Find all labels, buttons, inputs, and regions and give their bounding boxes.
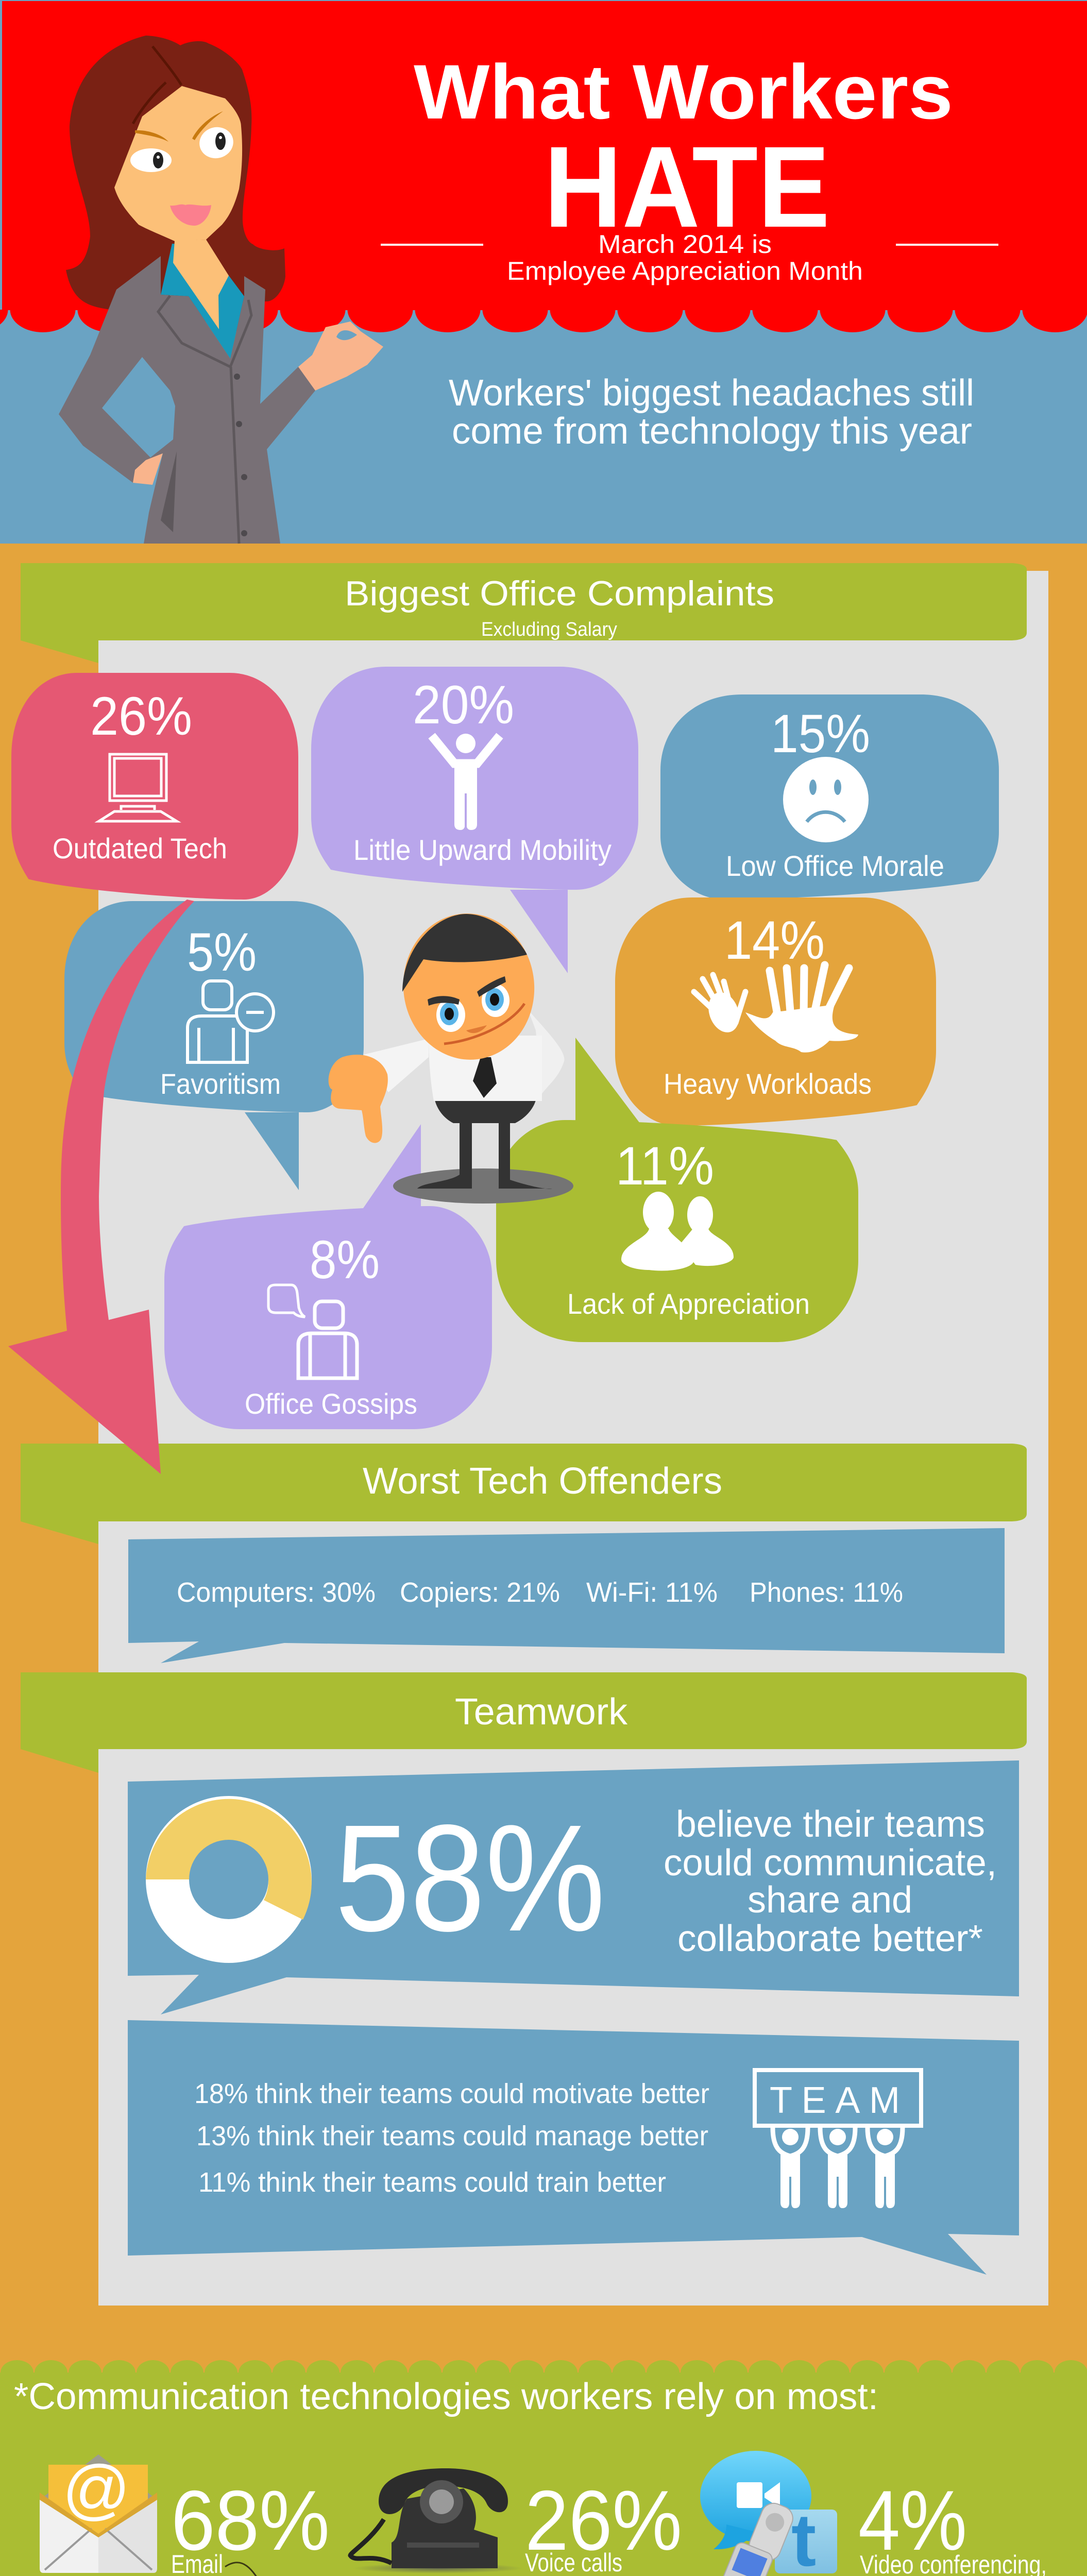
bubble: outdated tech xyxy=(11,673,298,900)
heading: biggest office complaints: Biggest Office Complaints xyxy=(345,574,774,613)
banner: 58 percent callout: could communicate, xyxy=(664,1842,997,1884)
panel: communication technologies: 68% xyxy=(171,2473,330,2568)
bubble: lack of appreciation xyxy=(496,1038,858,1342)
title: What Workers xyxy=(414,48,953,135)
icon: hands xyxy=(694,965,858,1053)
bubble: little upward mobility: Little Upward Mobility xyxy=(353,834,612,866)
icon: person with minus sign xyxy=(188,981,274,1062)
arrow: curly arrow to 71 percent xyxy=(225,2563,287,2576)
bubble: little upward mobility xyxy=(311,667,638,973)
bubble: favoritism text xyxy=(160,922,281,1100)
banner: 58 percent callout: believe their teams xyxy=(676,1804,985,1845)
bubble: favoritism text: Favoritism xyxy=(160,1067,281,1100)
title xyxy=(414,48,953,251)
subtitle: employee appreciation month xyxy=(381,230,998,285)
heading: teamwork xyxy=(21,1672,1027,1773)
banner: tech offender percentages: Computers: 30% xyxy=(177,1577,376,1608)
intro text: come from technology this year xyxy=(452,411,972,452)
icon: email envelope xyxy=(40,2451,157,2573)
panel: office complaints and teamwork xyxy=(98,571,1048,2306)
bubble: low office morale xyxy=(660,694,999,900)
panel: communication technologies: 4% xyxy=(858,2473,967,2568)
icon: computer xyxy=(99,754,177,821)
banner: team improvement stats: 18% think their teams could motivate better xyxy=(194,2078,709,2109)
icon: gossip person xyxy=(268,1285,357,1378)
heading: worst tech offenders xyxy=(21,1444,1027,1544)
icon: rotary telephone xyxy=(350,2468,523,2573)
bubble: office gossips: Office Gossips xyxy=(245,1387,417,1420)
bubble: heavy workloads: Heavy Workloads xyxy=(664,1067,872,1100)
arrow: from outdated tech to worst tech offenders xyxy=(8,900,194,1474)
bubble: heavy workloads: 14% xyxy=(724,910,825,971)
icon: team sign: TEAM xyxy=(770,2080,900,2121)
subtitle: employee appreciation month: March 2014 is xyxy=(598,230,772,259)
heading: teamwork: Teamwork xyxy=(455,1691,628,1733)
bubble: heavy workloads xyxy=(615,897,936,1126)
icon: two people xyxy=(621,1192,734,1271)
bubble: favoritism text: 5% xyxy=(187,922,257,982)
banner: 58 percent callout: share and xyxy=(748,1879,912,1921)
banner: tech offender percentages: Copiers: 21% xyxy=(400,1577,560,1608)
heading: worst tech offenders: Worst Tech Offenders xyxy=(363,1461,722,1502)
banner: team improvement stats xyxy=(128,2020,1019,2275)
bubble: lack of appreciation: 11% xyxy=(616,1136,714,1196)
banner: 58 percent callout: 58% xyxy=(335,1793,605,1963)
red header banner with scalloped edge xyxy=(0,1,1087,332)
subtitle: employee appreciation month: Employee Appreciation Month xyxy=(507,257,863,285)
icon: email envelope: @ xyxy=(62,2451,130,2527)
banner: tech offender percentages xyxy=(128,1528,1005,1663)
heading: *Communication technologies workers rely on most: xyxy=(14,2376,878,2417)
bubble: favoritism xyxy=(64,901,364,1190)
bubble: little upward mobility: 20% xyxy=(413,675,514,735)
intro text: Workers' biggest headaches still xyxy=(449,372,974,414)
heading: biggest office complaints xyxy=(21,563,1027,663)
bubble: outdated tech: Outdated Tech xyxy=(53,832,227,865)
title: HATE xyxy=(544,123,830,251)
bubble: office gossips: 8% xyxy=(310,1230,380,1290)
banner: team improvement stats: 13% think their teams could manage better xyxy=(196,2121,708,2151)
donut chart xyxy=(146,1796,312,1963)
banner: 58 percent callout: collaborate better* xyxy=(677,1918,983,1959)
banner: tech offender percentages: Wi-Fi: 11% xyxy=(586,1577,718,1608)
bubble: low office morale: 15% xyxy=(771,704,870,764)
banner: team improvement stats: 11% think their teams could train better xyxy=(198,2167,666,2198)
banner: 58 percent callout xyxy=(128,1760,1019,2014)
heading: biggest office complaints: Excluding Salary xyxy=(481,619,617,640)
banner: tech offender percentages: Phones: 11% xyxy=(750,1577,903,1608)
icon: video, phone and twitter xyxy=(700,2451,837,2576)
icon: businesswoman character xyxy=(59,36,383,544)
panel: communication technologies: 26% xyxy=(525,2473,682,2568)
icon: angry man with thumb down xyxy=(329,907,573,1204)
intro text xyxy=(449,372,974,452)
bubble: outdated tech: 26% xyxy=(90,686,192,747)
bubble: office gossips xyxy=(164,1124,492,1429)
bubble: lack of appreciation: Lack of Appreciation xyxy=(567,1287,810,1320)
icon: team sign xyxy=(755,2070,921,2208)
bubble: low office morale: Low Office Morale xyxy=(726,850,944,882)
panel: communication technologies xyxy=(0,2360,1087,2576)
